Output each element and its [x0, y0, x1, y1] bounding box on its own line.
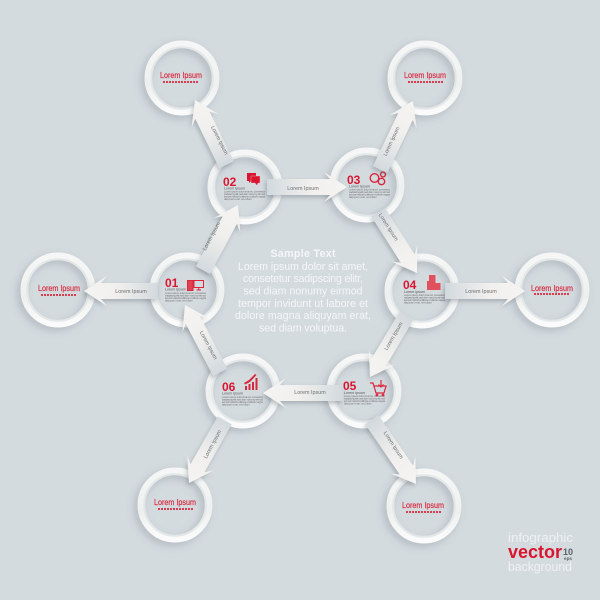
- step 06 content: sadipscing elitr, sed diam nonumy eirmod: [222, 398, 263, 402]
- step 06 content: Lorem ipsum dolor sit amet, consetetur: [222, 395, 263, 399]
- ring: right: [518, 256, 586, 324]
- center paragraph: sed diam voluptua.: [259, 322, 347, 334]
- icon: speech bubbles: [247, 173, 260, 186]
- step 02 content: Lorem Ipsum: [224, 186, 245, 190]
- step 03 content: sadipscing elitr, sed diam nonumy eirmod: [349, 190, 390, 194]
- icon: buildings: [427, 275, 440, 290]
- step 04 content: Lorem ipsum dolor sit amet, consetetur: [404, 293, 445, 297]
- step 03 content: 03: [347, 173, 361, 187]
- step 01 content: Lorem Ipsum: [165, 288, 186, 292]
- ring: step 05: [330, 357, 398, 425]
- step 01 content: 01: [165, 276, 179, 290]
- step 02 content: aliquyam erat, sed diam: [224, 197, 253, 201]
- step 03 content: Lorem Ipsum: [349, 184, 370, 188]
- center paragraph: consetetur sadipscing elitr,: [243, 273, 363, 285]
- step 04 content: [403, 275, 445, 304]
- logo text: [508, 530, 573, 574]
- step 02 content: [223, 173, 265, 201]
- label: bottom right arrow: Lorem Ipsum: [382, 431, 404, 461]
- outer label: bottom right: Lorem Ipsum: [402, 501, 444, 510]
- step 06 content: aliquyam erat, sed diam: [222, 402, 251, 406]
- label: bottom left arrow: Lorem Ipsum: [203, 429, 223, 460]
- label: step 03 to 04: Lorem Ipsum: [377, 213, 399, 243]
- center paragraph: Lorem ipsum dolor sit amet,: [238, 261, 368, 273]
- label: step 05 to 06: Lorem Ipsum: [294, 390, 326, 396]
- label: top right arrow: Lorem Ipsum: [383, 126, 402, 157]
- icon: shopping cart: [370, 380, 386, 396]
- arrow: step 01 to left: [84, 276, 158, 306]
- step 02 content: sadipscing elitr, sed diam nonumy eirmod: [224, 192, 265, 196]
- step 02 content: tempor invidunt ut labore et dolore magna: [224, 194, 265, 198]
- arrows: [84, 93, 525, 492]
- logo text: 10: [563, 547, 573, 557]
- step 05 content: [343, 379, 386, 406]
- step 01 content: Lorem ipsum dolor sit amet, consetetur: [165, 291, 206, 295]
- label: step 01 to 02: Lorem Ipsum: [202, 221, 222, 252]
- ring: left: [24, 256, 92, 324]
- label: right arrow: Lorem Ipsum: [465, 289, 497, 295]
- outer ring labels: [38, 71, 573, 512]
- center paragraph: tempor invidunt ut labore et: [238, 298, 368, 310]
- step 06 content: tempor invidunt ut labore et dolore magna: [222, 400, 263, 404]
- step 04 content: tempor invidunt ut labore et dolore magna: [404, 298, 445, 302]
- step 01 content: [165, 276, 206, 302]
- ring: step 01: [153, 256, 221, 324]
- logo text: eps: [564, 556, 573, 561]
- arrow labels: [115, 125, 497, 461]
- step 02 content: 02: [223, 175, 237, 189]
- logo text: background: [508, 559, 572, 574]
- center paragraph: dolore magna aliquyam erat,: [235, 310, 371, 322]
- step 05 content: Lorem ipsum dolor sit amet, consetetur: [344, 394, 385, 398]
- step 03 content: Lorem ipsum dolor sit amet, consetetur: [349, 188, 390, 192]
- arrow: step 04 to step 05: [357, 307, 420, 385]
- icon: gears: [370, 172, 385, 185]
- step 05 content: sadipscing elitr, sed diam nonumy eirmod: [344, 396, 385, 400]
- center text block: [235, 248, 371, 334]
- arrow: step 02 to step 03: [267, 172, 347, 202]
- step 04 content: 04: [403, 278, 417, 292]
- label: left arrow: Lorem Ipsum: [115, 289, 147, 295]
- ring: step 02: [211, 153, 279, 221]
- ring: bottom left: [141, 471, 209, 539]
- outer label: left: Lorem Ipsum: [38, 284, 80, 293]
- arrow: step 04 to right: [445, 276, 525, 306]
- label: step 02 to 03: Lorem Ipsum: [287, 186, 319, 192]
- ring: step 06: [209, 357, 277, 425]
- ring: top right: [391, 44, 459, 112]
- step 05 content: aliquyam erat, sed diam: [344, 402, 373, 406]
- outer label: top right: Lorem Ipsum: [404, 71, 446, 80]
- step 02 content: Lorem ipsum dolor sit amet, consetetur: [224, 190, 265, 194]
- center paragraph: [235, 261, 371, 334]
- label: top left arrow: Lorem Ipsum: [209, 125, 229, 156]
- outer label: top left: Lorem Ipsum: [160, 71, 202, 80]
- step contents: [165, 172, 445, 406]
- step 04 content: sadipscing elitr, sed diam nonumy eirmod: [404, 296, 445, 300]
- ring: step 04: [388, 257, 456, 325]
- ring: step 03: [333, 151, 401, 219]
- label: step 04 to 05: Lorem Ipsum: [384, 321, 405, 352]
- step 05 content: tempor invidunt ut labore et dolore magna: [344, 399, 385, 403]
- outer label: right: Lorem Ipsum: [531, 284, 573, 293]
- arrow: step 05 to bottom right: [359, 411, 428, 492]
- step 03 content: [347, 172, 390, 199]
- arrow: step 06 to step 01: [172, 298, 234, 379]
- step 06 content: 06: [222, 380, 236, 394]
- step 01 content: tempor invidunt ut labore et dolore magna: [165, 296, 206, 300]
- arrow: step 03 to step 04: [366, 204, 430, 281]
- step 05 content: 05: [343, 379, 357, 393]
- ring: bottom right: [390, 472, 458, 540]
- step 06 content: [222, 374, 263, 406]
- step 06 content: Lorem Ipsum: [222, 392, 243, 396]
- arrow: step 03 to top right: [367, 95, 427, 176]
- step 01 content: sadipscing elitr, sed diam nonumy eirmod: [165, 294, 206, 298]
- step 04 content: aliquyam erat, sed diam: [404, 300, 433, 304]
- logo text: infographic: [508, 530, 573, 545]
- center heading: Sample Text: [270, 248, 336, 260]
- step 04 content: Lorem Ipsum: [404, 290, 425, 294]
- rings: [24, 44, 586, 540]
- logo text: vector: [508, 542, 562, 562]
- step 01 content: aliquyam erat, sed diam: [165, 298, 194, 302]
- arrow: step 01 to step 02: [190, 198, 251, 277]
- icon: growth chart: [244, 374, 258, 390]
- ring: top left: [148, 44, 216, 112]
- arrow: step 02 to top left: [182, 93, 240, 171]
- step 03 content: aliquyam erat, sed diam: [349, 195, 378, 199]
- label: step 06 to 01: Lorem Ipsum: [198, 330, 218, 361]
- step 05 content: Lorem Ipsum: [344, 391, 365, 395]
- arrow: step 05 to step 06: [263, 378, 343, 408]
- arrow: step 06 to bottom left: [176, 413, 238, 490]
- icon: computer: [188, 280, 204, 290]
- center paragraph: sed diam nonumy eirmod: [244, 286, 363, 298]
- outer label: bottom left: Lorem Ipsum: [154, 498, 196, 507]
- step 03 content: tempor invidunt ut labore et dolore magna: [349, 192, 390, 196]
